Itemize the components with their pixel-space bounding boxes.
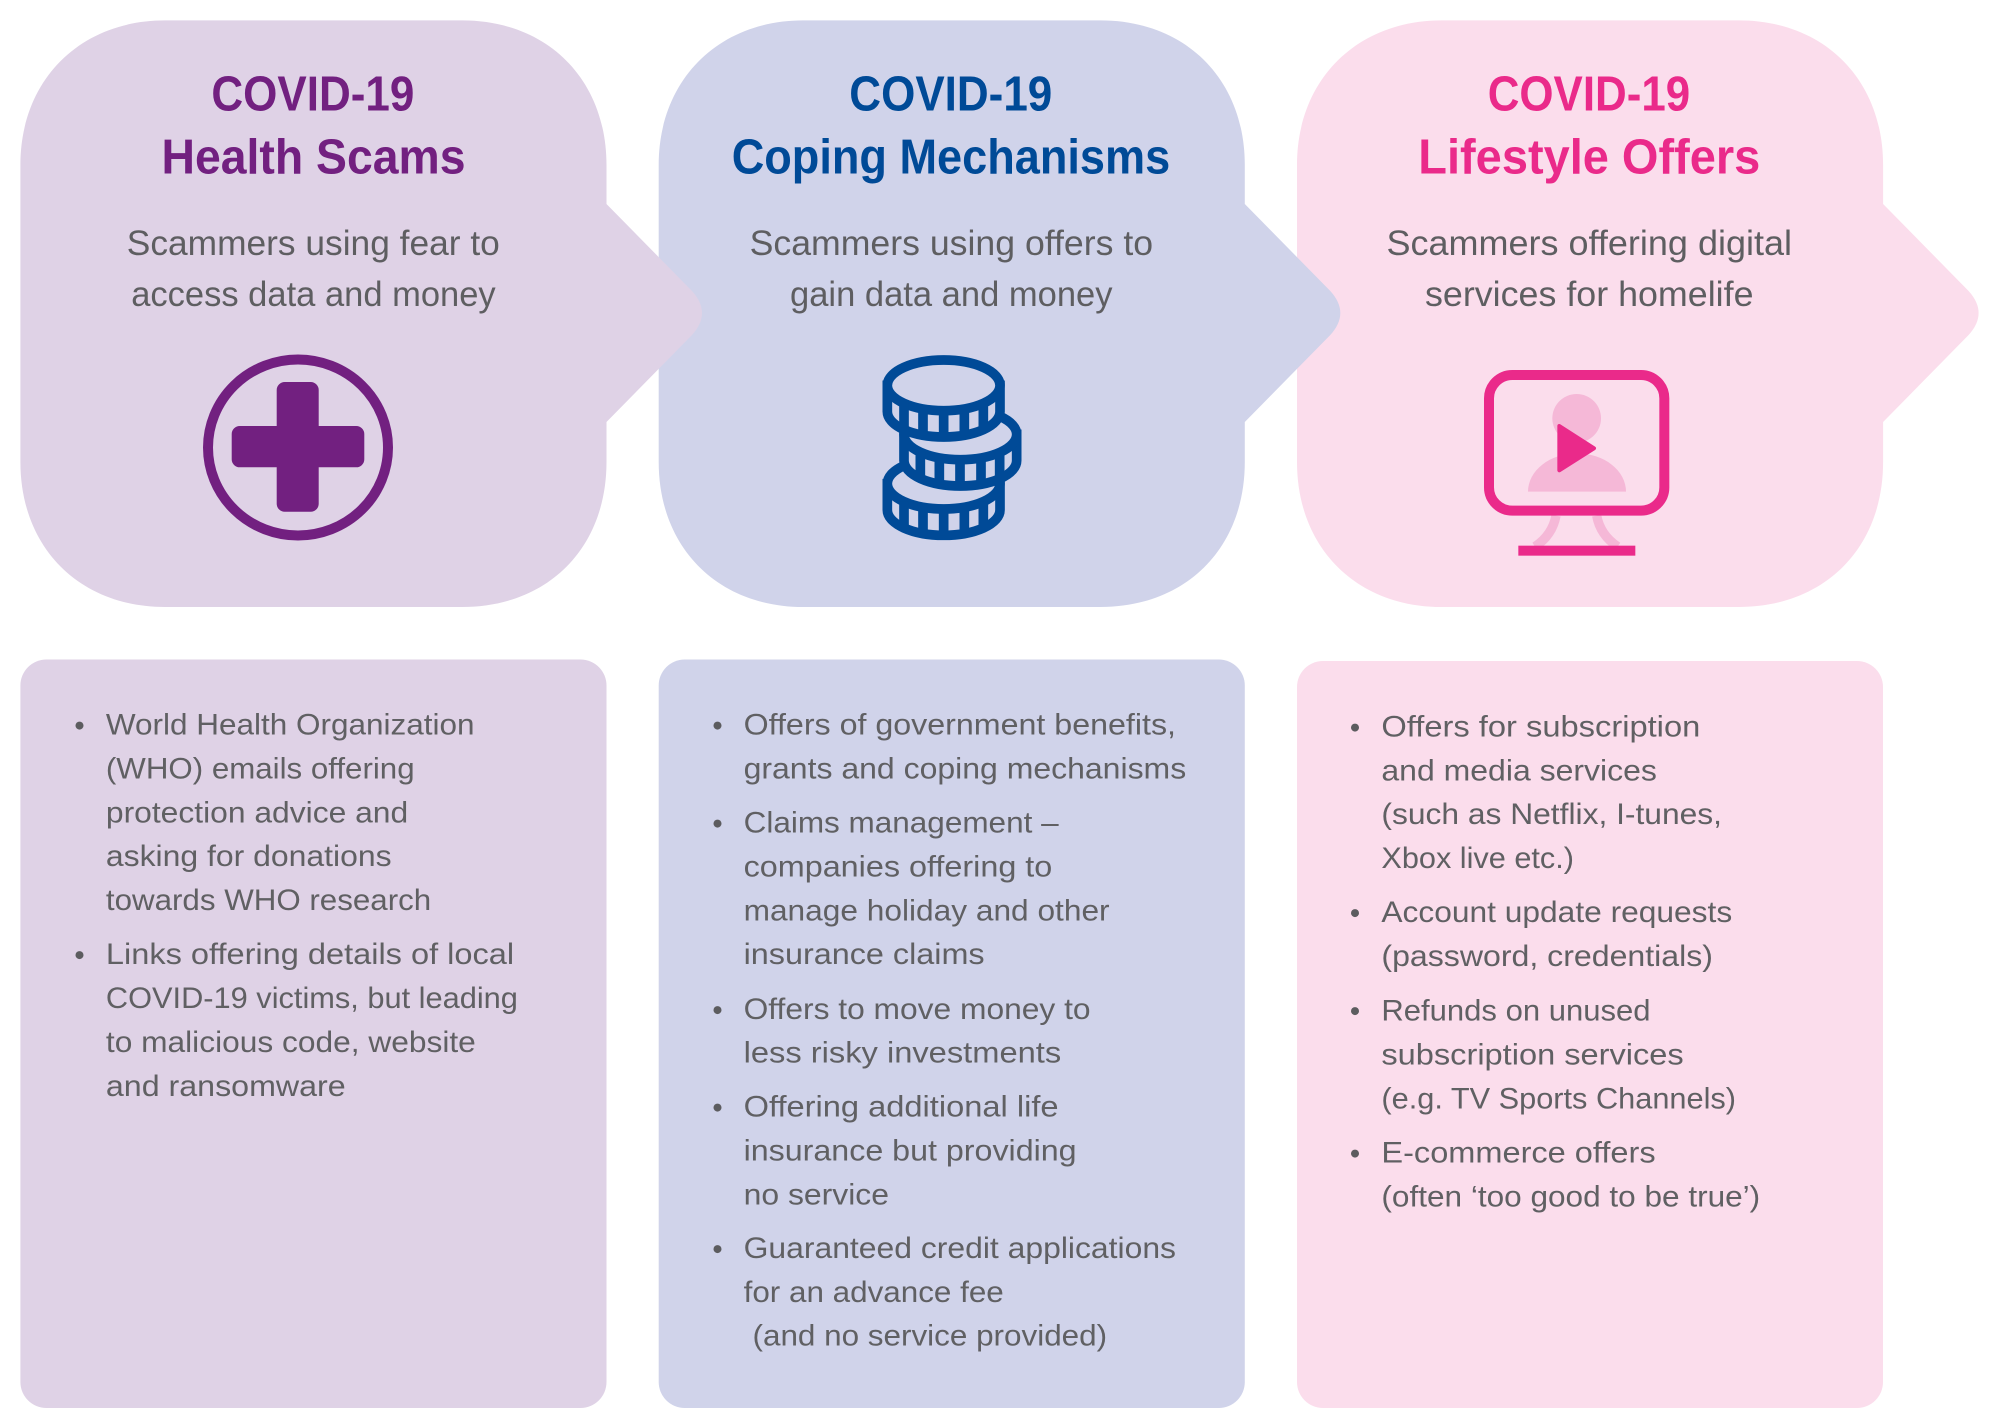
bullet list: lifestyle offers: (e.g. TV Sports Channels) (1381, 1082, 1736, 1115)
bullet list: health scams: Links offering details of local (106, 938, 514, 971)
heading: coping mechanisms: Coping Mechanisms (732, 130, 1170, 184)
bullet list: coping mechanisms: manage holiday and other (744, 895, 1110, 928)
panel: coping mechanisms details (659, 660, 1245, 1408)
heading: coping mechanisms (732, 68, 1170, 184)
bullet list: health scams (76, 709, 518, 1103)
bullet list: lifestyle offers: Refunds on unused (1381, 994, 1650, 1027)
bullet list: coping mechanisms: (and no service provided) (752, 1320, 1107, 1353)
bullet list: health scams: towards WHO research (106, 884, 431, 917)
bullet list: health scams: World Health Organization (106, 709, 475, 742)
text: lifestyle offers description: services for homelife (1425, 275, 1754, 314)
heading: lifestyle offers (1418, 68, 1760, 184)
bullet list: lifestyle offers: E-commerce offers (1381, 1137, 1656, 1170)
panel: lifestyle offers details (1297, 661, 1883, 1408)
text: health scams description: access data and money (131, 275, 496, 314)
bullet list: coping mechanisms: insurance claims (744, 938, 985, 971)
icon: monitor with video person (1489, 375, 1664, 556)
bullet list: lifestyle offers: Account update requests (1381, 896, 1732, 929)
bullet list: lifestyle offers: (password, credentials) (1381, 940, 1713, 973)
icon: medical cross in circle (208, 360, 388, 536)
bullet list: lifestyle offers: subscription services (1381, 1038, 1684, 1071)
text: coping mechanisms description (750, 224, 1153, 314)
panel: coping mechanisms header (659, 20, 1340, 607)
heading: health scams: Health Scams (162, 130, 466, 184)
text: coping mechanisms description: gain data and money (790, 275, 1113, 314)
panel: health scams header (20, 20, 702, 607)
bullet list: health scams: and ransomware (106, 1070, 346, 1103)
bullet list: lifestyle offers: Offers for subscription (1381, 711, 1700, 744)
bullet list: lifestyle offers (1351, 711, 1760, 1214)
bullet list: health scams: (WHO) emails offering (106, 753, 415, 786)
text: lifestyle offers description: Scammers offering digital (1386, 224, 1792, 263)
text: health scams description: Scammers using fear to (127, 224, 500, 263)
bullet list: coping mechanisms (714, 709, 1186, 1353)
bullet list: coping mechanisms: Offers of government benefits, (744, 709, 1176, 742)
text: health scams description (127, 224, 500, 314)
icon: stack of coins (887, 360, 1017, 535)
bullet list: lifestyle offers: (often ‘too good to be true’) (1381, 1181, 1760, 1214)
bullet list: health scams: asking for donations (106, 840, 392, 873)
heading: coping mechanisms: COVID-19 (849, 68, 1052, 122)
text: lifestyle offers description (1386, 224, 1792, 314)
bullet list: coping mechanisms: Offering additional life (744, 1091, 1059, 1124)
bullet list: coping mechanisms: less risky investments (744, 1036, 1061, 1069)
bullet list: health scams: protection advice and (106, 797, 408, 830)
text: coping mechanisms description: Scammers using offers to (750, 224, 1153, 263)
bullet list: lifestyle offers: Xbox live etc.) (1381, 842, 1574, 875)
bullet list: lifestyle offers: and media services (1381, 755, 1657, 788)
heading: lifestyle offers: COVID-19 (1488, 68, 1690, 122)
panel: health scams details (20, 660, 606, 1408)
heading: health scams (162, 68, 466, 184)
bullet list: coping mechanisms: Claims management – (744, 807, 1059, 840)
bullet list: coping mechanisms: insurance but providing (744, 1135, 1077, 1168)
bullet list: coping mechanisms: no service (744, 1179, 889, 1212)
heading: health scams: COVID-19 (211, 68, 414, 122)
bullet list: coping mechanisms: Offers to move money to (744, 993, 1091, 1026)
bullet list: health scams: to malicious code, website (106, 1026, 476, 1059)
bullet list: health scams: COVID-19 victims, but leading (106, 982, 518, 1015)
panel: lifestyle offers header (1297, 20, 1979, 607)
bullet list: coping mechanisms: Guaranteed credit applications (744, 1232, 1176, 1265)
bullet list: coping mechanisms: grants and coping mechanisms (744, 753, 1186, 786)
bullet list: coping mechanisms: for an advance fee (744, 1276, 1004, 1309)
bullet list: coping mechanisms: companies offering to (744, 851, 1052, 884)
bullet list: lifestyle offers: (such as Netflix, I-tunes, (1381, 798, 1722, 831)
heading: lifestyle offers: Lifestyle Offers (1418, 130, 1760, 184)
